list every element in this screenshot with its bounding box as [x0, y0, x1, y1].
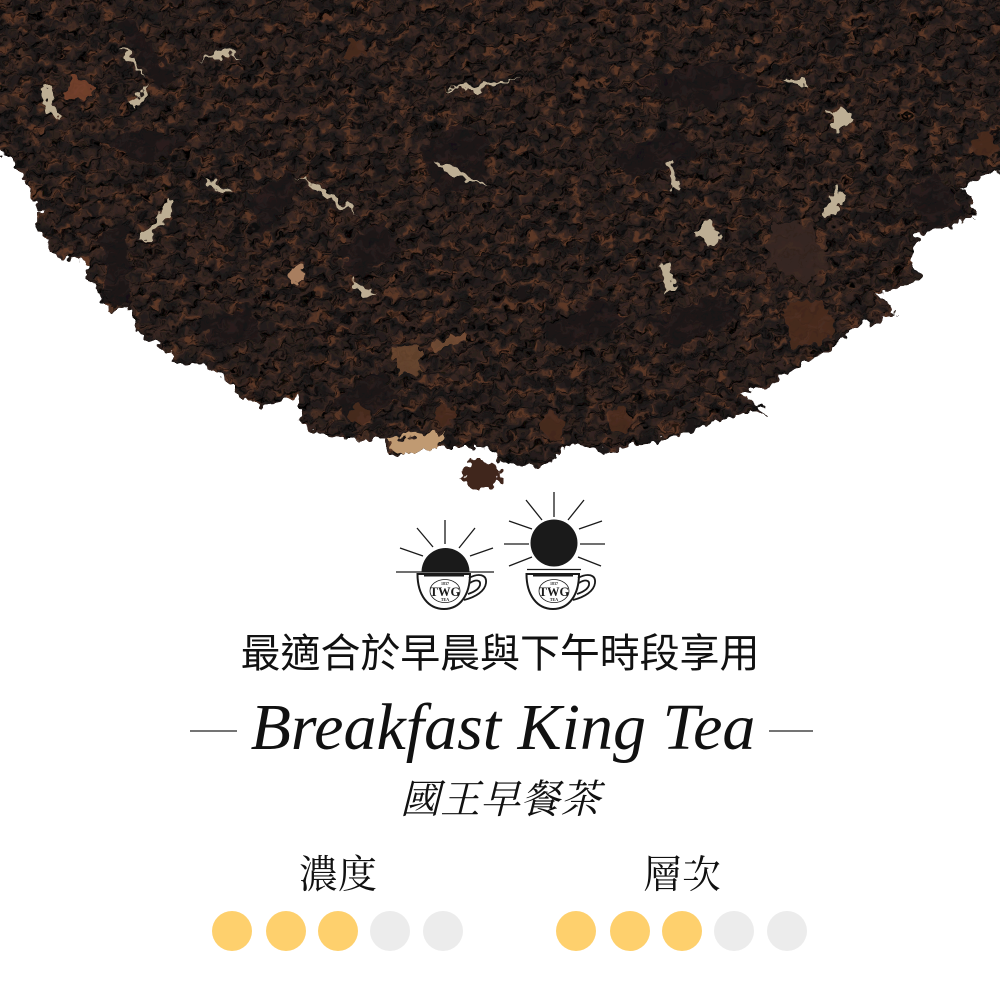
dots: strength rating	[212, 911, 463, 951]
pale tips	[42, 48, 853, 456]
tea leaves photo	[0, 0, 1000, 491]
subtitle: Chinese tea name: 國王早餐茶	[400, 777, 600, 822]
label: strength: 濃度	[299, 854, 377, 897]
title rule left	[190, 730, 237, 732]
heading: best time to enjoy: 最適合於早晨與下午時段享用	[241, 632, 759, 676]
title: English tea name: Breakfast King Tea	[251, 691, 755, 764]
icon: half sun over cup: TEA	[441, 597, 449, 602]
icon: full sun over cup	[504, 492, 605, 609]
icon: half sun over cup: TWG	[430, 585, 461, 599]
icon: full sun over cup: 1837	[550, 581, 558, 586]
dots: complexity rating	[556, 911, 807, 951]
title rule right	[769, 730, 813, 732]
icon: full sun over cup: TWG	[539, 585, 570, 599]
dark leaves	[100, 15, 965, 420]
icon: half sun over cup	[396, 520, 494, 609]
label: complexity: 層次	[643, 854, 721, 897]
stray tea piece	[461, 459, 502, 491]
brown particles	[65, 41, 998, 437]
icon: half sun over cup: 1837	[441, 581, 449, 586]
icon: full sun over cup: TEA	[550, 597, 558, 602]
